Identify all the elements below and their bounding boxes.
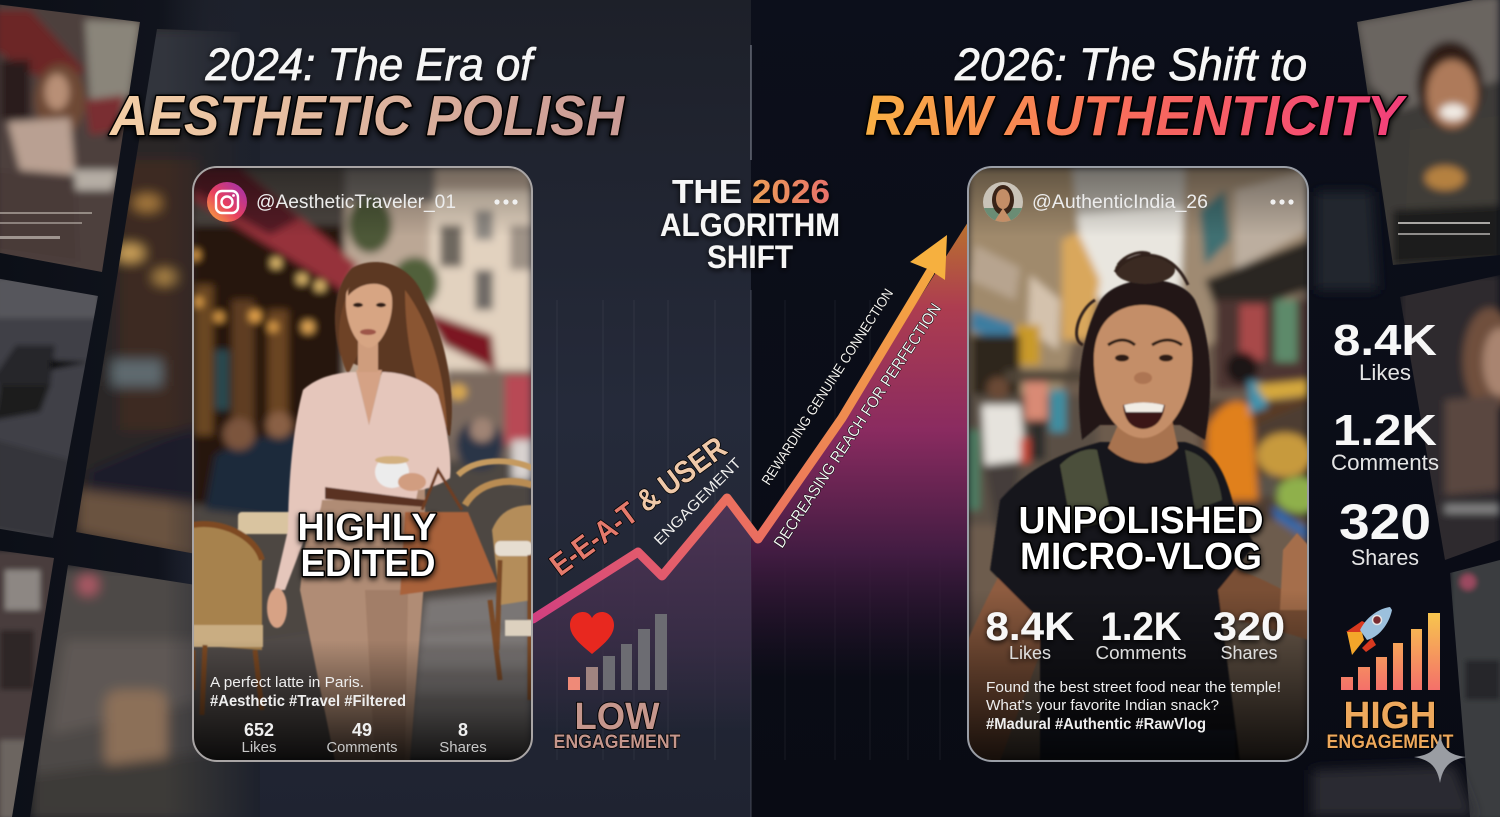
- caption: #Aesthetic #Travel #Filtered: [210, 693, 406, 710]
- chart fill under growth line: [533, 222, 968, 760]
- card: blurred street: [0, 550, 54, 817]
- stat row: Likes: [1009, 643, 1051, 663]
- stat row: Shares: [439, 739, 487, 756]
- card: dim strip: [1316, 192, 1378, 290]
- card: blurred dark cafe: [76, 29, 222, 554]
- stat row: Shares: [1220, 643, 1278, 663]
- shirt: [990, 442, 1255, 761]
- bar chart: high: [1341, 613, 1440, 690]
- stat: likes: Likes: [1359, 360, 1411, 385]
- stat row: 320: [1213, 605, 1285, 649]
- username: @AuthenticIndia_26: [1032, 192, 1208, 213]
- heading line: raw authenticity: RAW AUTHENTICITY: [865, 84, 1408, 148]
- stat: comments: [1331, 406, 1439, 475]
- heading line: 2024: 2024: The Era of: [205, 39, 537, 90]
- background: left half: [0, 0, 751, 817]
- menu dots: [494, 199, 518, 205]
- side stats: [1331, 316, 1439, 570]
- stat row: 652: [244, 720, 274, 740]
- label: highly edited: EDITED: [300, 543, 436, 585]
- phone frame: [193, 167, 532, 761]
- caption: What's your favorite Indian snack?: [986, 697, 1219, 714]
- photo: paris cafe background: [190, 167, 532, 761]
- card: bottom dim: [1312, 765, 1475, 817]
- photo: indian street background: [968, 167, 1324, 761]
- line label: engagement: ENGAGEMENT: [651, 455, 745, 549]
- bar chart: low: [568, 614, 667, 690]
- caption: #Madural #Authentic #RawVlog: [986, 716, 1206, 733]
- phone frame: [968, 167, 1308, 761]
- ground: [193, 600, 532, 761]
- hair back: [1079, 280, 1210, 440]
- label: highly edited: HIGHLY: [298, 507, 436, 549]
- high engagement block: [1326, 607, 1454, 753]
- heading line: 2026: 2026: The Shift to: [954, 39, 1307, 90]
- heading: right title: [865, 39, 1408, 148]
- photo: woman in pink sweater: [267, 262, 497, 761]
- stat: shares: Shares: [1351, 545, 1419, 570]
- stat: likes: [1333, 316, 1437, 385]
- belt: [325, 487, 425, 507]
- hand: [267, 588, 287, 628]
- photo: laughing woman: [968, 253, 1308, 761]
- stat: comments: 1.2K: [1333, 406, 1437, 455]
- heading: centre algorithm shift: [660, 173, 840, 275]
- text: algorithm: ALGORITHM: [660, 207, 840, 243]
- username: @AestheticTraveler_01: [256, 192, 456, 213]
- card: blurred grey object: [0, 275, 100, 540]
- card: blurred cafe woman: [0, 0, 145, 280]
- sweater: [288, 372, 450, 536]
- icon: rocket: [1346, 607, 1392, 655]
- low engagement block: [554, 612, 681, 753]
- background: left vignette: [0, 0, 210, 817]
- stat row: [986, 605, 1285, 663]
- caption: [210, 675, 406, 710]
- menu dots: [1270, 199, 1294, 205]
- background: right half: [751, 0, 1500, 817]
- caption: [986, 679, 1281, 733]
- pants: [300, 485, 425, 761]
- icon: instagram: [207, 182, 247, 222]
- stat row: 8.4K: [986, 605, 1075, 649]
- growth arrow line: [533, 235, 947, 619]
- vendor: [1200, 400, 1308, 520]
- card: blurred long-haired woman: [1400, 275, 1500, 565]
- neck: [1108, 420, 1178, 463]
- photo: cafe chairs: [193, 461, 532, 715]
- jeans: [1040, 730, 1235, 761]
- crowd: [968, 395, 1098, 525]
- line label: E-E-A-T and user: E-E-A-T & USER: [543, 430, 733, 583]
- stat row: [241, 720, 487, 756]
- label: unpolished micro-vlog: MICRO-VLOG: [1020, 536, 1262, 578]
- line label: rewarding genuine connection: REWARDING GENUINE CONNECTION: [758, 286, 896, 488]
- cup: [374, 462, 410, 488]
- stat row: Likes: [241, 739, 277, 756]
- card: blurred lower right: [1450, 555, 1500, 817]
- icon: avatar: [983, 182, 1023, 224]
- stat row: 8: [458, 720, 468, 740]
- caption: A perfect latte in Paris.: [210, 675, 364, 691]
- photo shade: [194, 168, 531, 230]
- line label: decreasing reach: DECREASING REACH FOR PERFECTION: [771, 301, 945, 551]
- heading: left title: [108, 39, 626, 148]
- face: [1094, 305, 1192, 438]
- text: low: LOW: [574, 696, 660, 738]
- text: engagement: ENGAGEMENT: [554, 732, 681, 753]
- stat: shares: 320: [1339, 494, 1431, 550]
- panel: right phone post: [968, 167, 1324, 761]
- text: the 2026: THE 2026: [672, 173, 830, 210]
- arms: [969, 577, 1042, 760]
- label: unpolished micro-vlog: UNPOLISHED: [1018, 500, 1264, 542]
- stat row: Comments: [1096, 643, 1186, 663]
- stat: likes: 8.4K: [1333, 316, 1437, 365]
- text: engagement: ENGAGEMENT: [1326, 732, 1454, 753]
- neck and face: [358, 340, 378, 372]
- card: blurred latte: [30, 565, 234, 817]
- label: unpolished micro-vlog: [1018, 500, 1264, 578]
- text: shift: SHIFT: [707, 239, 793, 275]
- heading line: aesthetic polish: AESTHETIC POLISH: [108, 84, 626, 148]
- bag: [400, 512, 497, 595]
- text: high: HIGH: [1344, 695, 1436, 737]
- seated men: [205, 432, 305, 520]
- icon: sparkle watermark: [1414, 735, 1466, 783]
- right blurred background cards: [1312, 0, 1500, 817]
- stat row: 49: [352, 720, 372, 740]
- arrow head: [910, 235, 947, 280]
- card: blurred laughing woman: [1350, 0, 1500, 270]
- panel: left phone post: [190, 167, 532, 761]
- centre divider: [750, 45, 752, 160]
- left blurred background cards: [0, 0, 260, 817]
- photo shade: [969, 168, 1307, 230]
- straps: [1060, 449, 1112, 530]
- label: highly edited: [298, 507, 436, 585]
- icon: heart: [570, 612, 614, 654]
- stat: shares: [1339, 494, 1431, 570]
- stat: comments: Comments: [1331, 450, 1439, 475]
- caption: Found the best street food near the temple!: [986, 679, 1281, 696]
- stat row: Comments: [326, 739, 398, 756]
- stat row: 1.2K: [1100, 605, 1182, 649]
- background: fade of left cards into panel: [165, 0, 260, 817]
